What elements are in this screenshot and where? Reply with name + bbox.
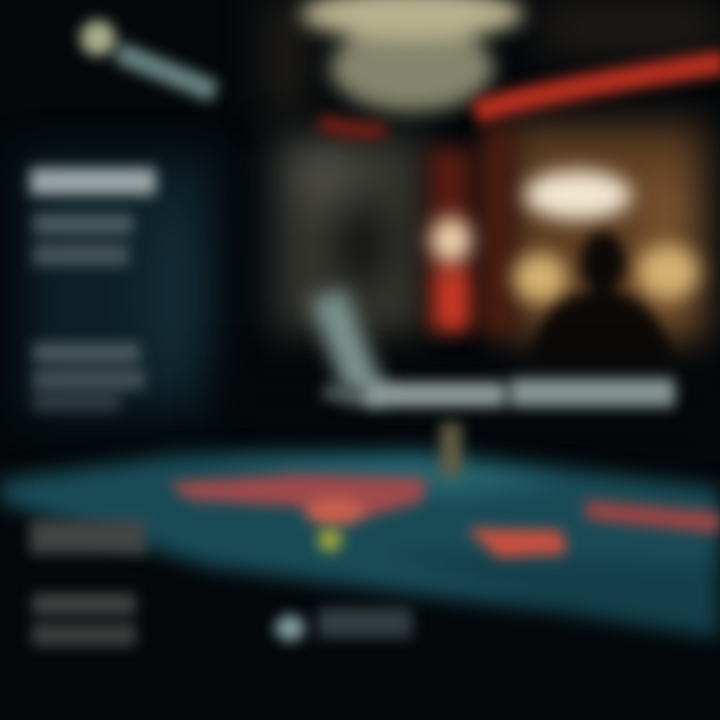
table red betting marks <box>168 474 720 558</box>
left text block 4 <box>32 594 136 646</box>
marker <box>318 423 462 552</box>
red stripe <box>320 62 720 131</box>
bottom caption blob <box>275 608 412 641</box>
lights <box>430 170 699 330</box>
left text block 3 <box>30 520 146 554</box>
panel: left dark sidebar <box>25 155 215 415</box>
table <box>0 450 720 638</box>
panel: red columns <box>428 128 515 336</box>
panel: grey middle wall <box>275 135 425 335</box>
heading blobs <box>323 378 675 407</box>
silhouette <box>530 232 675 365</box>
left text block 1 <box>30 168 156 266</box>
chandelier <box>300 0 524 112</box>
top-left logo blob <box>80 20 215 92</box>
panel: upper right wall <box>265 0 720 110</box>
dark band under room <box>220 365 720 435</box>
left text block 2 <box>33 343 145 410</box>
panel: lit room <box>505 125 705 345</box>
pale diagonal shape <box>310 288 388 402</box>
